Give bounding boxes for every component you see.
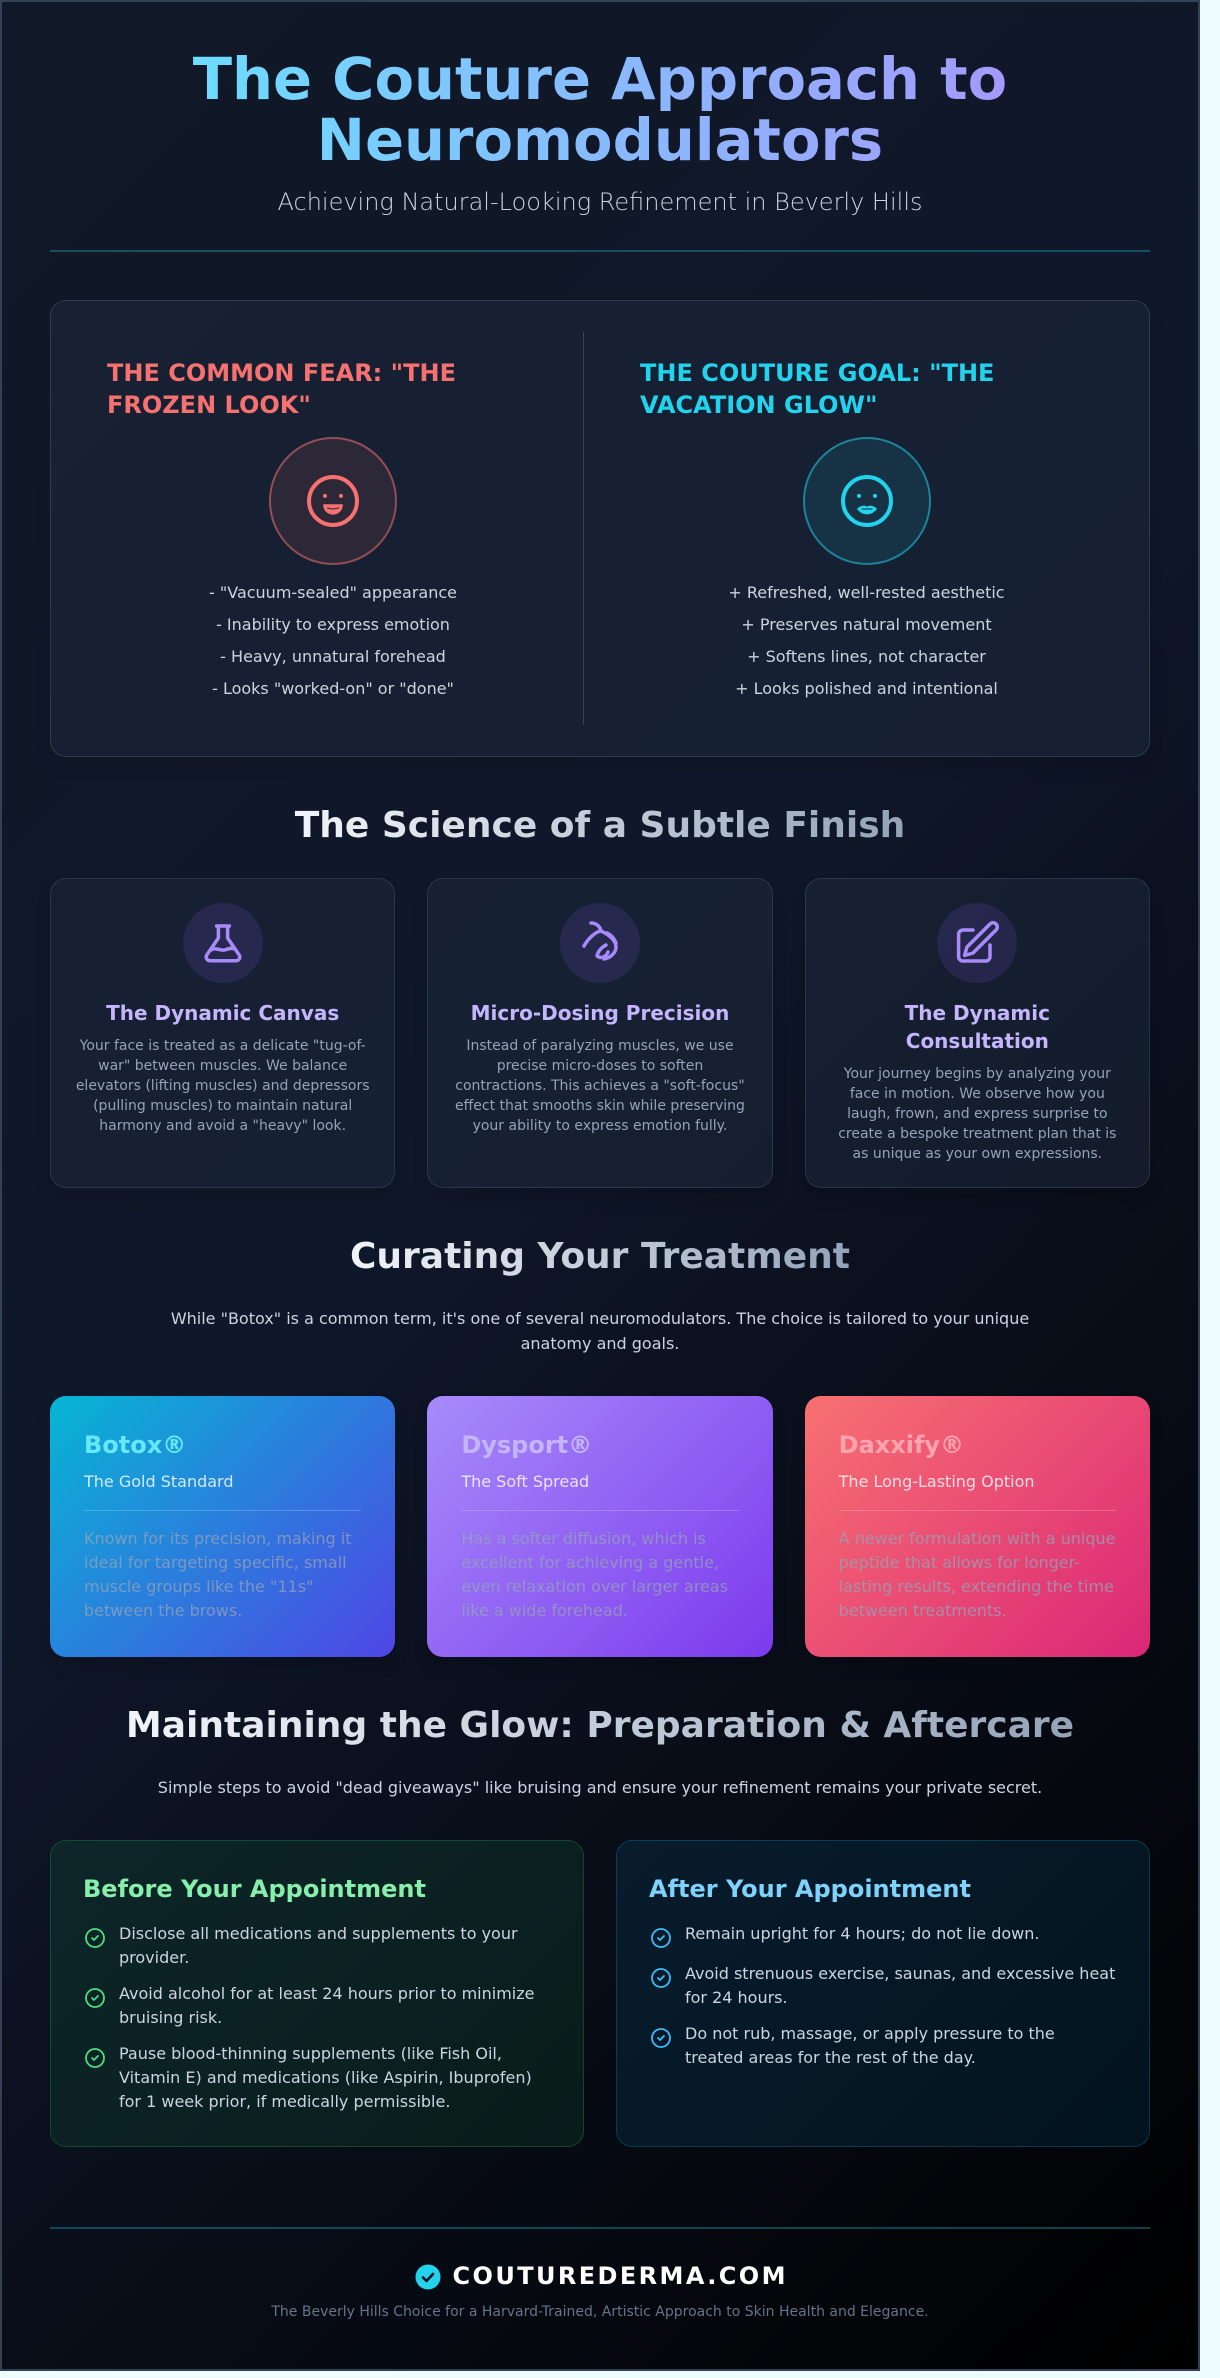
card title: Consultation bbox=[906, 1029, 1049, 1053]
checklist item 3: Do not rub, massage, or apply pressure to the bbox=[685, 2024, 1055, 2043]
checklist item 2: Avoid strenuous exercise, saunas, and excessive heat bbox=[685, 1964, 1115, 1983]
card description: contractions. This achieves a "soft-focus" bbox=[455, 1078, 745, 1094]
card: Dysport bbox=[427, 1396, 773, 1657]
panel: fear versus goal comparison bbox=[50, 300, 1150, 757]
checklist item 1: provider. bbox=[119, 1948, 189, 1967]
checklist item 3: for 1 week prior, if medically permissible. bbox=[119, 2092, 450, 2111]
product name: Dysport® bbox=[461, 1431, 592, 1459]
icon: verified check bbox=[416, 2264, 440, 2290]
card title: Micro-Dosing Precision bbox=[471, 1001, 729, 1025]
card description: face in motion. We observe how you bbox=[850, 1086, 1105, 1102]
card description: precise micro-doses to soften bbox=[497, 1058, 703, 1074]
list: fear symptoms: - Inability to express emotion bbox=[216, 615, 450, 634]
product name: Botox® bbox=[84, 1431, 186, 1459]
product tagline: The Long-Lasting Option bbox=[839, 1472, 1035, 1491]
heading: couture goal bbox=[640, 359, 994, 419]
list: goal benefits bbox=[728, 583, 1005, 698]
card description: as unique as your own expressions. bbox=[852, 1146, 1102, 1162]
title: Neuromodulators bbox=[317, 106, 883, 174]
card description bbox=[76, 1038, 370, 1134]
product description: A newer formulation with a unique bbox=[839, 1529, 1115, 1548]
checklist item 3: Pause blood-thinning supplements (like Fish Oil, bbox=[119, 2044, 502, 2063]
list: goal benefits: + Softens lines, not character bbox=[747, 647, 986, 666]
list: goal benefits: + Preserves natural movement bbox=[741, 615, 992, 634]
card description: Your journey begins by analyzing your bbox=[844, 1066, 1111, 1082]
icon: flask bbox=[183, 903, 263, 983]
list: fear symptoms: - Looks "worked-on" or "done" bbox=[212, 679, 454, 698]
title: The Couture Approach to bbox=[193, 46, 1007, 113]
card description: laugh, frown, and express surprise to bbox=[847, 1106, 1108, 1122]
product description: lasting results, extending the time bbox=[839, 1577, 1114, 1596]
heading: curating your treatment: Curating Your Treatment bbox=[350, 1236, 850, 1277]
checklist item 3: treated areas for the rest of the day. bbox=[685, 2048, 976, 2067]
checklist item 1: Disclose all medications and supplements to your bbox=[119, 1924, 518, 1943]
product description: peptide that allows for longer- bbox=[839, 1553, 1080, 1572]
heading: the science: The Science of a Subtle Finish bbox=[295, 805, 905, 846]
card title: The Dynamic Canvas bbox=[106, 1001, 339, 1025]
title bbox=[193, 50, 1007, 171]
card description bbox=[838, 1066, 1116, 1162]
checklist item 3 bbox=[651, 2024, 1055, 2067]
heading: couture goal: VACATION GLOW" bbox=[640, 391, 878, 419]
card description: Instead of paralyzing muscles, we use bbox=[466, 1038, 734, 1054]
subtitle: Achieving Natural-Looking Refinement in Beverly Hills bbox=[278, 188, 922, 216]
card: dynamic consultation bbox=[805, 878, 1150, 1188]
product description: Has a softer diffusion, which is bbox=[461, 1529, 706, 1548]
icon: micro-dose bbox=[560, 903, 640, 983]
icon: pencil and square bbox=[937, 903, 1017, 983]
card description: (pulling muscles) to maintain natural bbox=[93, 1098, 352, 1114]
list: fear symptoms: - "Vacuum-sealed" appearance bbox=[209, 583, 457, 602]
product description: like a wide forehead. bbox=[461, 1601, 628, 1620]
checklist item 3 bbox=[85, 2044, 532, 2111]
list: goal benefits: + Refreshed, well-rested aesthetic bbox=[728, 583, 1005, 602]
icon: frozen face bbox=[269, 437, 397, 565]
checklist item 1 bbox=[85, 1924, 518, 1967]
website name: COUTUREDERMA.COM bbox=[452, 2262, 788, 2290]
intro text: maintaining: Simple steps to avoid "dead giveaways" like bruising and ensure your refinement remains your private secret. bbox=[158, 1778, 1042, 1797]
card description: your ability to express emotion fully. bbox=[473, 1118, 727, 1134]
intro text: curating: anatomy and goals. bbox=[521, 1334, 679, 1353]
card description: Your face is treated as a delicate "tug-of- bbox=[80, 1038, 366, 1054]
checklist item 2: bruising risk. bbox=[119, 2008, 222, 2027]
list: fear symptoms: - Heavy, unnatural forehead bbox=[220, 647, 446, 666]
heading: couture goal: THE COUTURE GOAL: "THE bbox=[640, 359, 994, 387]
checklist item 2 bbox=[651, 1964, 1115, 2007]
card description: effect that smooths skin while preserving bbox=[455, 1098, 745, 1114]
panel: after your appointment bbox=[616, 1840, 1150, 2147]
icon: glowing face bbox=[802, 437, 930, 565]
card description: elevators (lifting muscles) and depressors bbox=[76, 1078, 370, 1094]
product tagline: The Gold Standard bbox=[84, 1472, 234, 1491]
product description: Known for its precision, making it bbox=[84, 1529, 352, 1548]
list: goal benefits: + Looks polished and intentional bbox=[735, 679, 998, 698]
footer tagline: The Beverly Hills Choice for a Harvard-Trained, Artistic Approach to Skin Health and Elegance. bbox=[271, 2304, 929, 2320]
product name: Daxxify® bbox=[839, 1431, 964, 1459]
card title bbox=[904, 1001, 1050, 1053]
checklist item 2: Avoid alcohol for at least 24 hours prior to minimize bbox=[119, 1984, 534, 2003]
heading: common fear: THE COMMON FEAR: "THE bbox=[107, 359, 456, 387]
card description: harmony and avoid a "heavy" look. bbox=[99, 1118, 346, 1134]
heading: common fear bbox=[107, 359, 456, 419]
column: the common fear bbox=[107, 359, 457, 698]
product tagline: The Soft Spread bbox=[461, 1472, 589, 1491]
card: Botox bbox=[50, 1396, 395, 1657]
footer brand bbox=[416, 2262, 788, 2290]
card description: create a bespoke treatment plan that is bbox=[838, 1126, 1116, 1142]
product description bbox=[461, 1529, 728, 1620]
checklist item 2: for 24 hours. bbox=[685, 1988, 788, 2007]
product description: between treatments. bbox=[839, 1601, 1007, 1620]
heading: after: After Your Appointment bbox=[649, 1875, 971, 1903]
list: fear symptoms bbox=[209, 583, 457, 698]
card: Daxxify bbox=[805, 1396, 1150, 1657]
intro text: curating bbox=[171, 1308, 1029, 1353]
product description: between the brows. bbox=[84, 1601, 242, 1620]
column: the couture goal bbox=[640, 359, 1005, 698]
heading: before: Before Your Appointment bbox=[83, 1875, 426, 1903]
checklist item 1: Remain upright for 4 hours; do not lie down. bbox=[685, 1924, 1040, 1943]
card description: war" between muscles. We balance bbox=[98, 1058, 347, 1074]
card description bbox=[455, 1038, 745, 1134]
heading: maintaining the glow: Maintaining the Glow: Preparation & Aftercare bbox=[126, 1705, 1074, 1746]
card: dynamic canvas bbox=[50, 878, 395, 1188]
product description: ideal for targeting specific, small bbox=[84, 1553, 347, 1572]
card title: The Dynamic bbox=[905, 1001, 1050, 1025]
product description bbox=[838, 1529, 1115, 1620]
panel: before your appointment bbox=[50, 1840, 584, 2147]
product description: excellent for achieving a gentle, bbox=[461, 1553, 719, 1572]
product description: muscle groups like the "11s" bbox=[84, 1577, 313, 1596]
checklist item 2 bbox=[85, 1984, 534, 2027]
product description: even relaxation over larger areas bbox=[461, 1577, 728, 1596]
product description bbox=[84, 1529, 352, 1620]
heading: common fear: FROZEN LOOK" bbox=[107, 391, 311, 419]
card: micro-dosing precision bbox=[427, 878, 773, 1188]
checklist item 3: Vitamin E) and medications (like Aspirin, Ibuprofen) bbox=[119, 2068, 532, 2087]
intro text: curating: While "Botox" is a common term, it's one of several neuromodulators. The choice is tailored to your unique bbox=[171, 1308, 1029, 1328]
